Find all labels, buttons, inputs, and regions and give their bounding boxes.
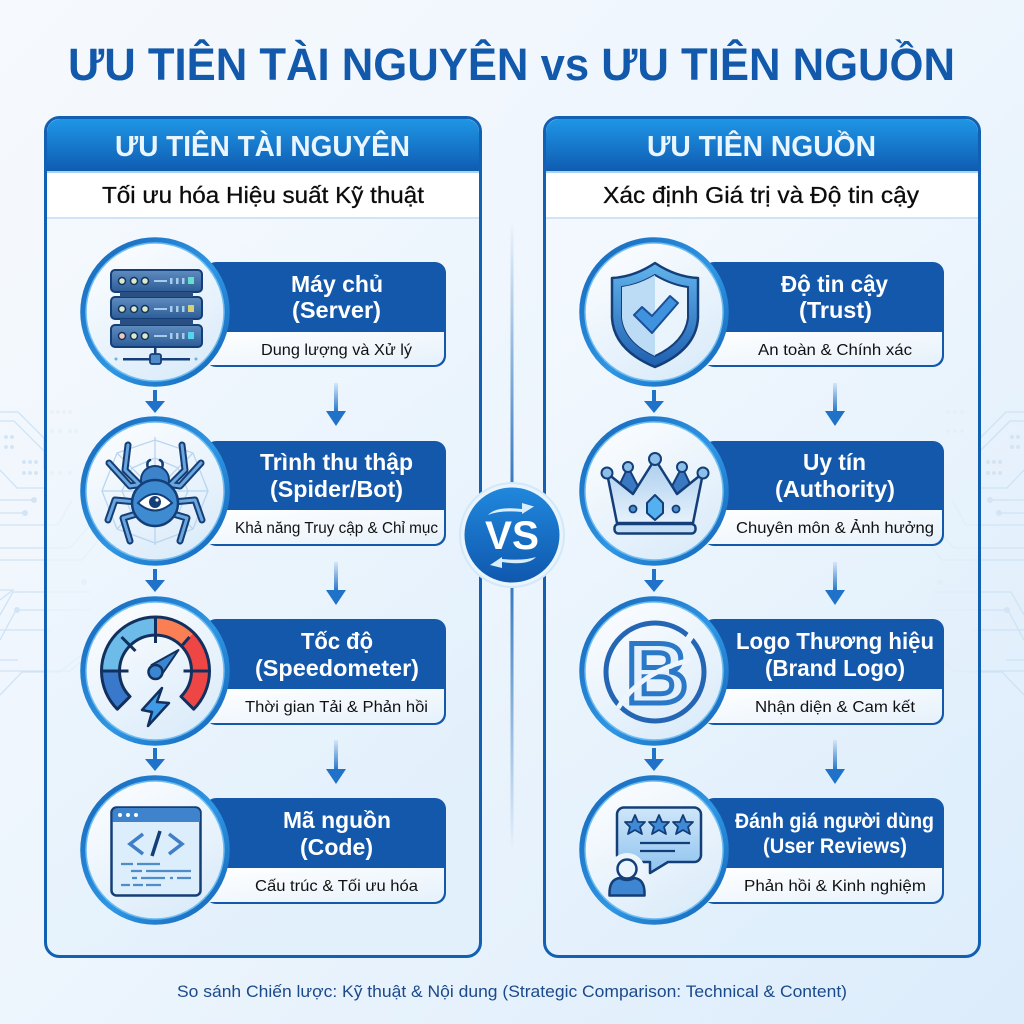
title: ƯU TIÊN TÀI NGUYÊN vs ƯU TIÊN NGUỒN <box>68 39 955 90</box>
card: brand <box>703 619 944 725</box>
arrow: authority to brand (card column) <box>825 562 845 605</box>
card: authority: (Authority) <box>775 476 895 502</box>
panel subtitle: right <box>546 171 978 219</box>
icon: speedometer <box>83 599 227 743</box>
card: spider: Khả năng Truy cập & Chỉ mục <box>235 520 438 537</box>
card: code <box>205 798 446 904</box>
card: server: Dung lượng và Xử lý <box>261 342 412 359</box>
card: reviews: Phản hồi & Kinh nghiệm <box>744 878 926 895</box>
card: authority: Uy tín <box>803 449 866 475</box>
arrow: speed to code (card column) <box>326 740 346 784</box>
card: authority: Chuyên môn & Ảnh hưởng <box>736 518 934 537</box>
panel subtitle: right: Xác định Giá trị và Độ tin cậy <box>603 182 920 208</box>
panel header: left <box>47 119 479 172</box>
panel subtitle: left <box>47 171 479 219</box>
icon: spider <box>83 419 227 563</box>
card: reviews: Đánh giá người dùng <box>735 810 934 833</box>
card: trust <box>703 262 944 367</box>
icon: code window <box>83 778 227 922</box>
card: reviews: (User Reviews) <box>763 835 907 858</box>
arrow: brand to reviews (card column) <box>825 740 845 784</box>
card: server <box>205 262 446 367</box>
panel: right <box>544 118 980 956</box>
icon: server <box>83 240 227 384</box>
arrow: trust to authority (card column) <box>825 383 845 426</box>
panel header: left: ƯU TIÊN TÀI NGUYÊN <box>115 129 410 163</box>
panel subtitle: left: Tối ưu hóa Hiệu suất Kỹ thuật <box>102 182 425 208</box>
icon: bottom swap arrow <box>490 557 536 568</box>
panel: left <box>46 118 480 956</box>
arrow: brand to reviews (icon column) <box>644 748 664 771</box>
arrow: spider to speed (icon column) <box>145 569 165 592</box>
card: brand: Nhận diện & Cam kết <box>755 699 916 716</box>
center divider <box>510 220 514 850</box>
card: code: Cấu trúc & Tối ưu hóa <box>255 878 418 895</box>
icon: crown <box>582 419 726 563</box>
panel header: right <box>546 119 978 172</box>
card: speed <box>205 619 446 725</box>
icon: shield <box>582 240 726 384</box>
card: spider: (Spider/Bot) <box>270 476 403 502</box>
card: authority <box>703 441 944 546</box>
card: speed: (Speedometer) <box>255 655 419 681</box>
arrow: spider to speed (card column) <box>326 562 346 605</box>
card: brand: (Brand Logo) <box>765 655 905 681</box>
card: server: Máy chủ <box>291 271 383 297</box>
card: speed: Tốc độ <box>301 628 373 654</box>
icon: top swap arrow <box>488 503 534 515</box>
panel header: right: ƯU TIÊN NGUỒN <box>647 129 876 163</box>
arrow: server to spider (card column) <box>326 383 346 426</box>
card: spider: Trình thu thập <box>260 449 413 475</box>
vs badge <box>460 483 564 587</box>
card: speed: Thời gian Tải & Phản hồi <box>245 699 428 716</box>
card: reviews <box>703 798 944 904</box>
card: server: (Server) <box>292 297 381 323</box>
icon: brand logo: B <box>626 626 688 722</box>
arrow: speed to code (icon column) <box>145 748 165 771</box>
footer caption: So sánh Chiến lược: Kỹ thuật & Nội dung (Strategic Comparison: Technical & Content) <box>177 982 847 1001</box>
arrow: server to spider (icon column) <box>145 390 165 413</box>
card: trust: (Trust) <box>799 297 872 323</box>
icon: brand logo <box>582 599 726 743</box>
card: code: Mã nguồn <box>283 807 391 833</box>
card: trust: Độ tin cậy <box>781 271 888 297</box>
card: code: (Code) <box>300 834 373 860</box>
card: brand: Logo Thương hiệu <box>736 628 934 654</box>
card: spider <box>205 441 446 546</box>
arrow: authority to brand (icon column) <box>644 569 664 592</box>
arrow: trust to authority (icon column) <box>644 390 664 413</box>
card: trust: An toàn & Chính xác <box>758 342 912 359</box>
icon: user reviews <box>582 778 726 922</box>
vs badge: VS <box>485 514 539 558</box>
